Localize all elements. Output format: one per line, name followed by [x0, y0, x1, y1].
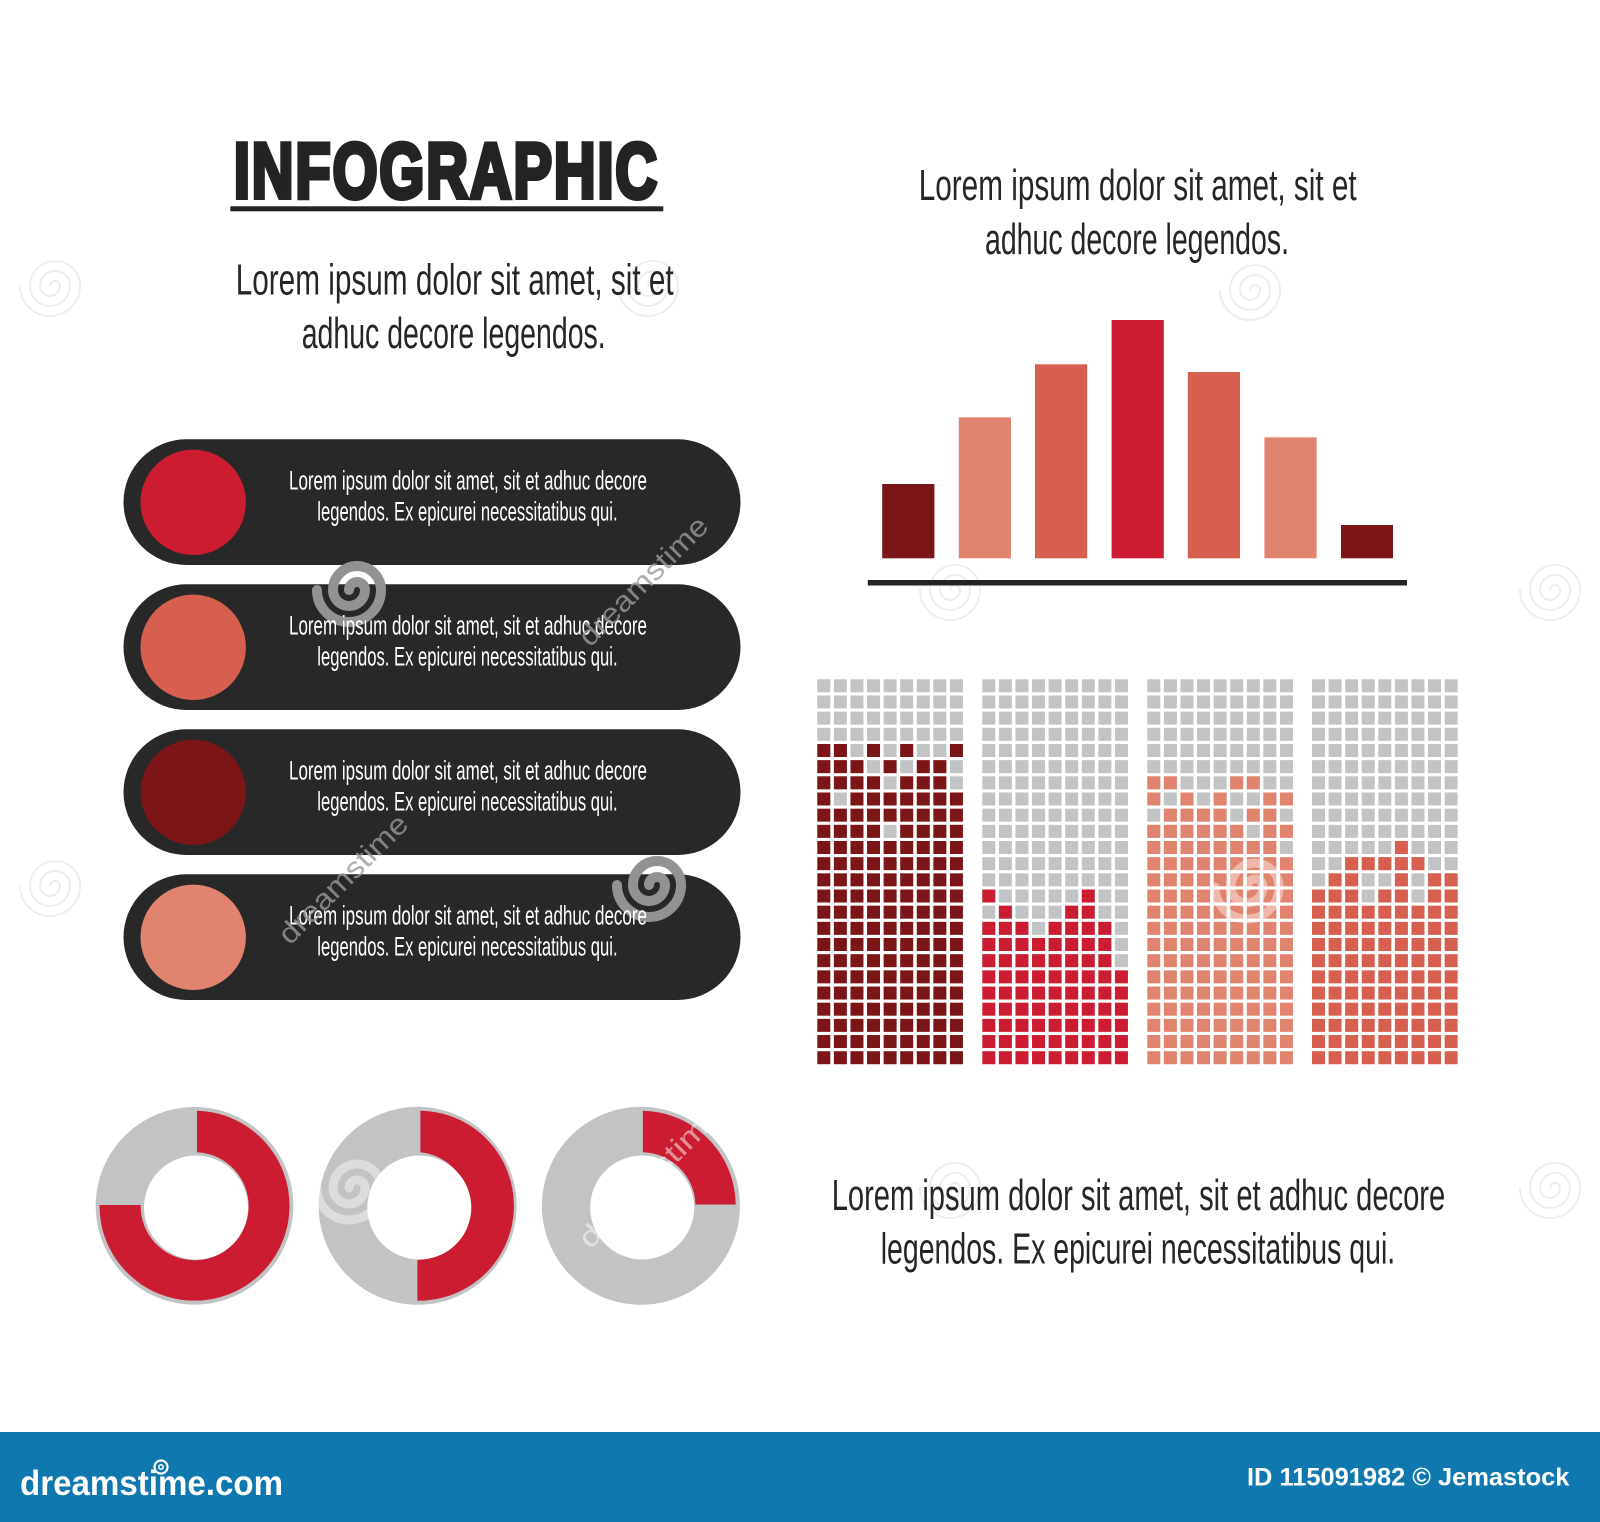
pill 2: Lorem ipsum dolor sit amet, sit et adhuc decore: [289, 610, 647, 640]
watermark text: dreamstime: [572, 510, 715, 653]
pill 3: [124, 729, 740, 855]
watermark text: [272, 510, 729, 1255]
bar chart: [868, 320, 1407, 586]
text block: bottom right: [832, 1171, 1445, 1274]
footer logo: dreamstime.com: [20, 1464, 283, 1503]
pill 4: [124, 861, 740, 1000]
pill 1: [124, 439, 740, 565]
watermark text: dreamstime: [272, 808, 415, 951]
pill 1: legendos. Ex epicurei necessitatibus qui.: [317, 497, 618, 527]
donut chart 2: half: [319, 1107, 517, 1305]
pill 1: Lorem ipsum dolor sit amet, sit et adhuc decore: [289, 465, 647, 495]
pill 2: [124, 566, 740, 710]
pill 2: legendos. Ex epicurei necessitatibus qui.: [317, 642, 618, 672]
text block: intro right: adhuc decore legendos.: [985, 215, 1289, 264]
text block: intro right: Lorem ipsum dolor sit amet, sit et: [919, 161, 1357, 210]
donut chart 3: one quarter: [542, 1107, 740, 1305]
footer band: [0, 1432, 1600, 1522]
panel: pill list: [124, 439, 740, 1000]
pictogram grid 3: salmon: [1147, 679, 1293, 1064]
pictogram grid 1: dark red: [817, 679, 963, 1064]
donut chart 1: three quarters: [96, 1107, 293, 1305]
text block: intro left: [236, 255, 674, 358]
title: INFOGRAPHIC: [234, 127, 659, 215]
pill 3: Lorem ipsum dolor sit amet, sit et adhuc decore: [289, 755, 647, 785]
pictogram grid 4: coral: [1312, 679, 1458, 1064]
text block: intro left: adhuc decore legendos.: [302, 309, 606, 358]
pill 4: legendos. Ex epicurei necessitatibus qui.: [317, 932, 618, 962]
text block: intro right: [919, 161, 1357, 264]
watermark spirals over the artwork: [317, 863, 1279, 1220]
faint background watermark spirals: [20, 261, 1580, 1218]
text block: intro left: Lorem ipsum dolor sit amet, sit et: [236, 255, 674, 304]
footer credit: ID 115091982 © Jemastock: [1247, 1464, 1569, 1492]
pictogram grid 2: crimson: [982, 679, 1128, 1064]
pill 3: legendos. Ex epicurei necessitatibus qui.: [317, 787, 618, 817]
pill 4: Lorem ipsum dolor sit amet, sit et adhuc decore: [289, 900, 647, 930]
watermark text: dreamstime: [572, 1098, 729, 1255]
